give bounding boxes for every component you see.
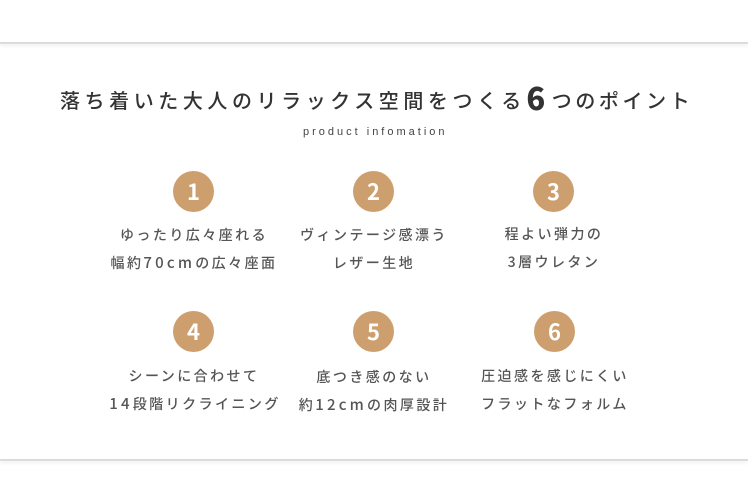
bottom divider: [0, 459, 748, 461]
point 5: [299, 311, 449, 415]
point 6 text: [481, 366, 629, 414]
point 2 text: レザー生地: [333, 253, 415, 273]
subtitle: product infomation: [303, 126, 448, 138]
point 5 text: 底つき感のない: [316, 367, 432, 387]
point 1: [111, 171, 277, 273]
point 3: [505, 171, 603, 272]
point 4: [109, 311, 281, 414]
number badge 4: [173, 311, 214, 352]
point 4 text: 14段階リクライニング: [109, 393, 281, 414]
point 5 text: [299, 367, 449, 415]
point 6: [481, 311, 629, 414]
number badge 6: 6: [548, 315, 561, 347]
point 6 text: 圧迫感を感じにくい: [481, 366, 629, 386]
number badge 1: [173, 171, 214, 212]
point 3 text: 3層ウレタン: [508, 252, 600, 272]
point 5 text: 約12cmの肉厚設計: [299, 394, 449, 415]
number badge 3: 3: [547, 175, 560, 207]
top divider: [0, 42, 748, 44]
point 1 text: [111, 225, 277, 273]
point 4 text: シーンに合わせて: [129, 366, 259, 386]
number badge 2: [353, 171, 394, 212]
point 3 text: 程よい弾力の: [505, 224, 603, 244]
point 1 text: ゆったり広々座れる: [120, 225, 268, 245]
point 6 text: フラットなフォルム: [481, 394, 629, 414]
number badge 2: 2: [367, 175, 380, 207]
point 3 text: [505, 224, 603, 272]
point 1 text: 幅約70cmの広々座面: [111, 252, 277, 273]
number badge 4: 4: [187, 315, 200, 347]
point 2 text: ヴィンテージ感漂う: [300, 225, 448, 245]
number badge 5: 5: [367, 315, 380, 347]
point 2 text: [300, 225, 448, 273]
point 2: [300, 171, 448, 273]
number badge 5: [353, 311, 394, 352]
title: 落ち着いた大人のリラックス空間をつくる6つのポイント: [60, 74, 693, 119]
point 4 text: [109, 366, 281, 414]
number badge 6: [534, 311, 575, 352]
number badge 1: 1: [187, 175, 200, 207]
number badge 3: [533, 171, 574, 212]
